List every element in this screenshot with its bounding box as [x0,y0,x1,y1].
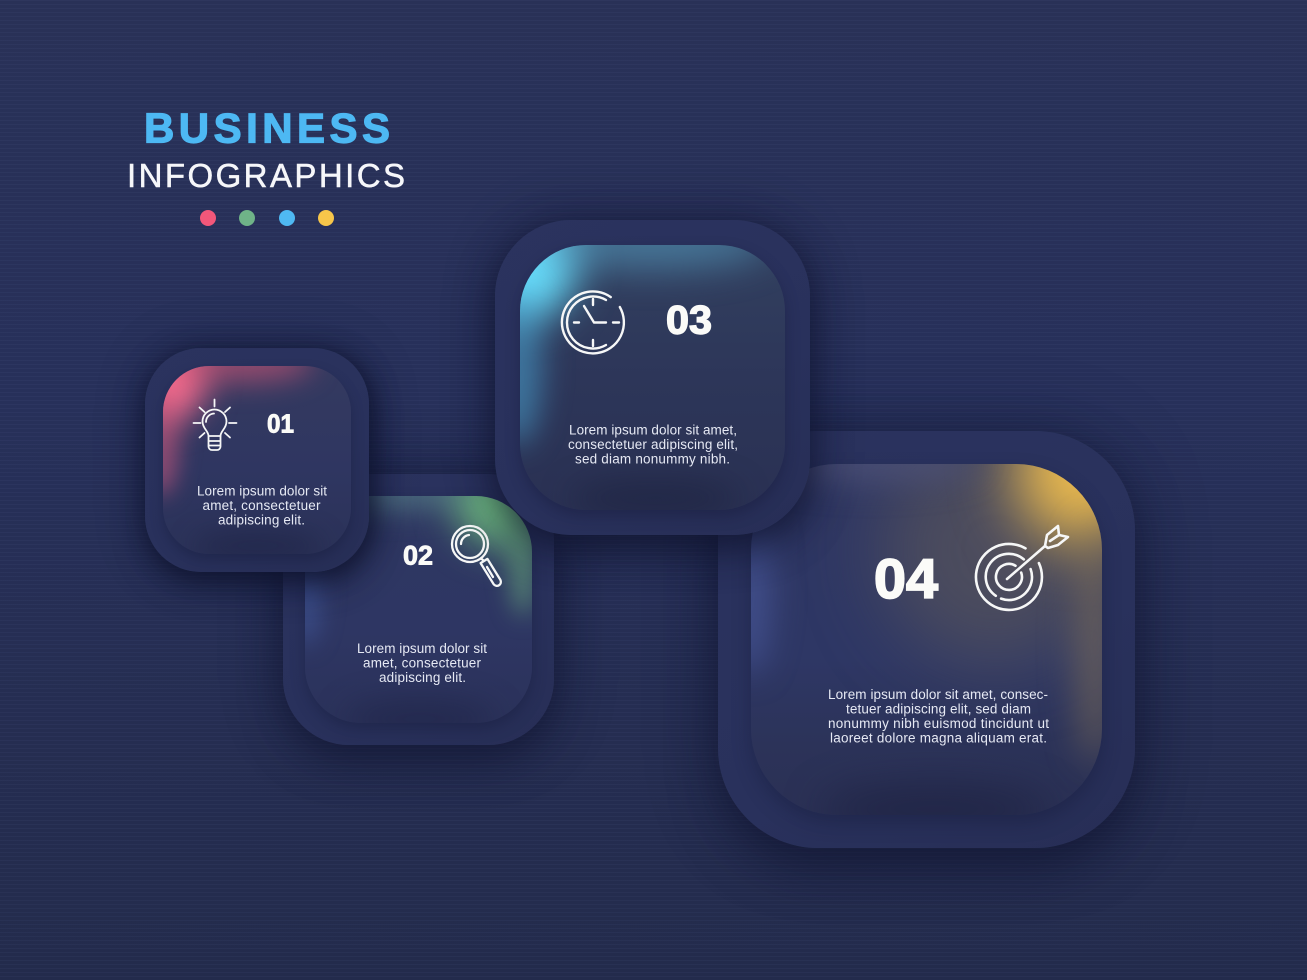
description 03: Lorem ipsum dolor sit amet, [569,422,737,438]
description 02 [357,641,487,685]
description 04: nonummy nibh euismod tincidunt ut [828,716,1049,731]
description 02: Lorem ipsum dolor sit [357,641,487,656]
description 03: consectetuer adipiscing elit, [568,437,738,452]
panel: step 01 [145,348,369,572]
panel: step 04 [718,431,1135,848]
icon: magnifying glass [452,526,501,586]
heading: business: BUSINESS [144,104,390,152]
description 02: amet, consectetuer [363,656,482,670]
number 01: 01 [267,408,294,438]
panel: step 03 [495,220,810,535]
description 01: Lorem ipsum dolor sit [197,484,327,498]
number 02: 02 [403,540,433,570]
number 04: 04 [874,547,938,610]
description 02: adipiscing elit. [379,670,466,685]
title block [127,104,405,226]
description 01: amet, consectetuer [202,498,321,513]
description 04: tetuer adipiscing elit, sed diam [846,702,1031,716]
description 01: adipiscing elit. [218,512,305,528]
card face: step 04 [751,464,1102,815]
card face: step 01 [163,366,351,554]
description 04: Lorem ipsum dolor sit amet, consec- [828,687,1048,702]
description 03 [568,422,738,466]
number 03: 03 [666,298,712,342]
icon: light bulb [194,400,236,450]
colour dots [200,210,334,226]
icon: clock [562,291,624,353]
card face: step 03 [520,245,785,510]
description 04: laoreet dolore magna aliquam erat. [830,730,1047,746]
description 01 [197,484,327,528]
icon: target with arrow [976,526,1068,610]
heading: infographics: INFOGRAPHICS [127,157,405,194]
card face: step 02 [305,496,532,723]
description 04 [828,687,1049,746]
description 03: sed diam nonummy nibh. [575,452,730,466]
panel: step 02 [283,474,554,745]
